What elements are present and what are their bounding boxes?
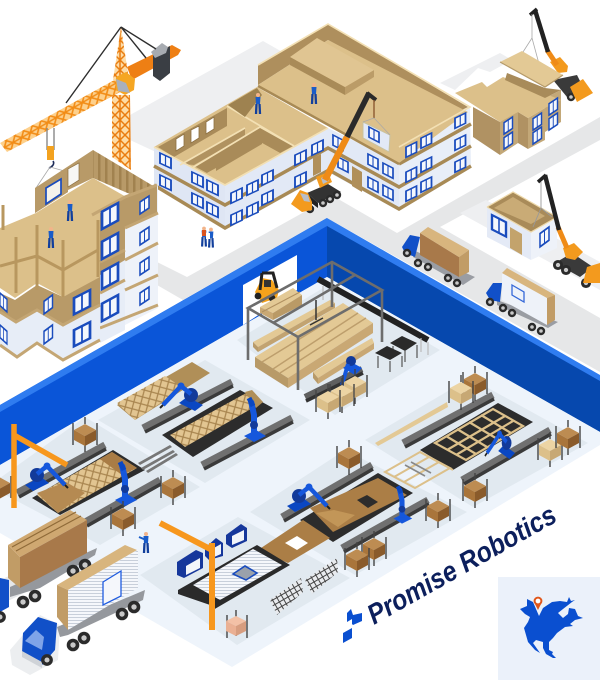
deck bbox=[0, 178, 128, 298]
crane jib bbox=[0, 78, 124, 152]
lower tan band bbox=[0, 277, 100, 325]
factory worker bbox=[139, 532, 148, 553]
lumber staging area bbox=[248, 262, 428, 419]
raised pad on deck bbox=[290, 38, 374, 95]
overhead conveyor bbox=[318, 279, 428, 355]
hanging spreader bbox=[310, 300, 323, 325]
cab bbox=[116, 72, 135, 95]
wood frame on table bbox=[435, 409, 523, 460]
rear ribbed walls bbox=[93, 150, 155, 205]
timber ledges bbox=[154, 124, 471, 228]
mobile crane by house bbox=[533, 175, 600, 288]
lower siding bbox=[0, 305, 100, 360]
steel racks bbox=[270, 558, 338, 615]
small rail bbox=[305, 369, 363, 401]
lifted lumber stack bbox=[260, 288, 302, 320]
main block rear wall bbox=[258, 24, 468, 112]
separate beam bbox=[313, 338, 374, 384]
company name: Promise Robotics bbox=[362, 499, 561, 630]
room dividers bbox=[154, 106, 328, 185]
left wall bbox=[0, 218, 327, 465]
blue factory walls bbox=[0, 218, 600, 465]
main lumber stack bbox=[255, 303, 373, 388]
truss station left bbox=[0, 417, 185, 536]
tower crane bbox=[0, 27, 181, 188]
large L-shaped modular building bbox=[154, 24, 471, 230]
lifted slab bbox=[500, 51, 563, 87]
module faces bbox=[473, 107, 500, 155]
supervisors reading plan bbox=[202, 227, 213, 248]
logo mark bbox=[343, 609, 362, 643]
framing station right bbox=[375, 366, 580, 508]
tower windows bbox=[102, 196, 149, 321]
lower ledges bbox=[0, 305, 100, 360]
doors bbox=[313, 154, 362, 192]
building workers bbox=[48, 200, 72, 248]
wing left siding face bbox=[154, 147, 225, 230]
module windows bbox=[504, 98, 558, 149]
map panel bbox=[498, 577, 600, 680]
right wall bbox=[327, 224, 600, 432]
truck with white panels bbox=[486, 268, 558, 335]
mobile crane and modular block top right bbox=[455, 9, 593, 155]
main block left siding face bbox=[328, 128, 399, 211]
wing front windows bbox=[231, 140, 323, 225]
main deck bbox=[258, 40, 468, 163]
hook block bbox=[36, 128, 68, 188]
columns and beams bbox=[0, 205, 98, 297]
roof workers bbox=[256, 83, 316, 114]
wall panel assembly table bbox=[178, 520, 330, 610]
robot at small rail bbox=[342, 356, 362, 385]
sheathing station middle bbox=[282, 440, 450, 577]
wing right siding face bbox=[225, 128, 330, 230]
counter jib bbox=[127, 45, 181, 80]
wall top edges bbox=[0, 218, 600, 412]
light carts bbox=[316, 369, 367, 419]
delivery truck brown load bbox=[0, 510, 97, 623]
forklift bbox=[255, 273, 279, 303]
pink material crate bbox=[226, 610, 247, 638]
small house module with crane bbox=[487, 192, 557, 260]
brand wordmark bbox=[343, 499, 561, 643]
crane truck bbox=[550, 57, 593, 102]
factory floor bbox=[0, 277, 600, 667]
tower tan and siding bbox=[100, 197, 125, 343]
mobile crane at main building with wall panel bbox=[291, 93, 390, 213]
floor zones bbox=[0, 285, 588, 645]
deck front edge bbox=[258, 86, 399, 164]
tall building under construction bbox=[0, 150, 158, 360]
module tops bbox=[455, 77, 561, 122]
long lumber bbox=[253, 300, 335, 352]
orange gantry bottom bbox=[160, 523, 212, 630]
gantry frame bbox=[248, 262, 382, 390]
clerestory windows bbox=[176, 117, 214, 151]
truck with brown panels bbox=[402, 227, 475, 287]
wing rear wall bbox=[158, 108, 227, 157]
main block right siding face bbox=[399, 107, 471, 211]
wood frame on floor bbox=[385, 452, 453, 488]
raised panel window bbox=[35, 163, 79, 213]
stacked window frames bbox=[177, 524, 247, 578]
truss station upper bbox=[117, 362, 293, 469]
lower windows bbox=[0, 290, 90, 346]
tower ledges bbox=[92, 185, 158, 328]
counterweight bbox=[151, 43, 170, 81]
wing deck bbox=[154, 87, 328, 185]
stay cables bbox=[66, 27, 156, 103]
orange gantry left bbox=[14, 424, 67, 508]
location pin bbox=[535, 598, 541, 610]
work tables bbox=[375, 336, 417, 372]
crane mast bbox=[112, 95, 131, 170]
background road network bbox=[130, 41, 600, 372]
parapet highlight bbox=[258, 24, 470, 147]
North America silhouette bbox=[520, 597, 583, 658]
delivery truck white load bbox=[10, 545, 145, 675]
main block windows bbox=[333, 113, 466, 201]
loading door bbox=[243, 255, 297, 325]
stairwell bbox=[228, 88, 262, 117]
crane boom bbox=[547, 50, 557, 65]
wing left windows bbox=[160, 153, 218, 217]
